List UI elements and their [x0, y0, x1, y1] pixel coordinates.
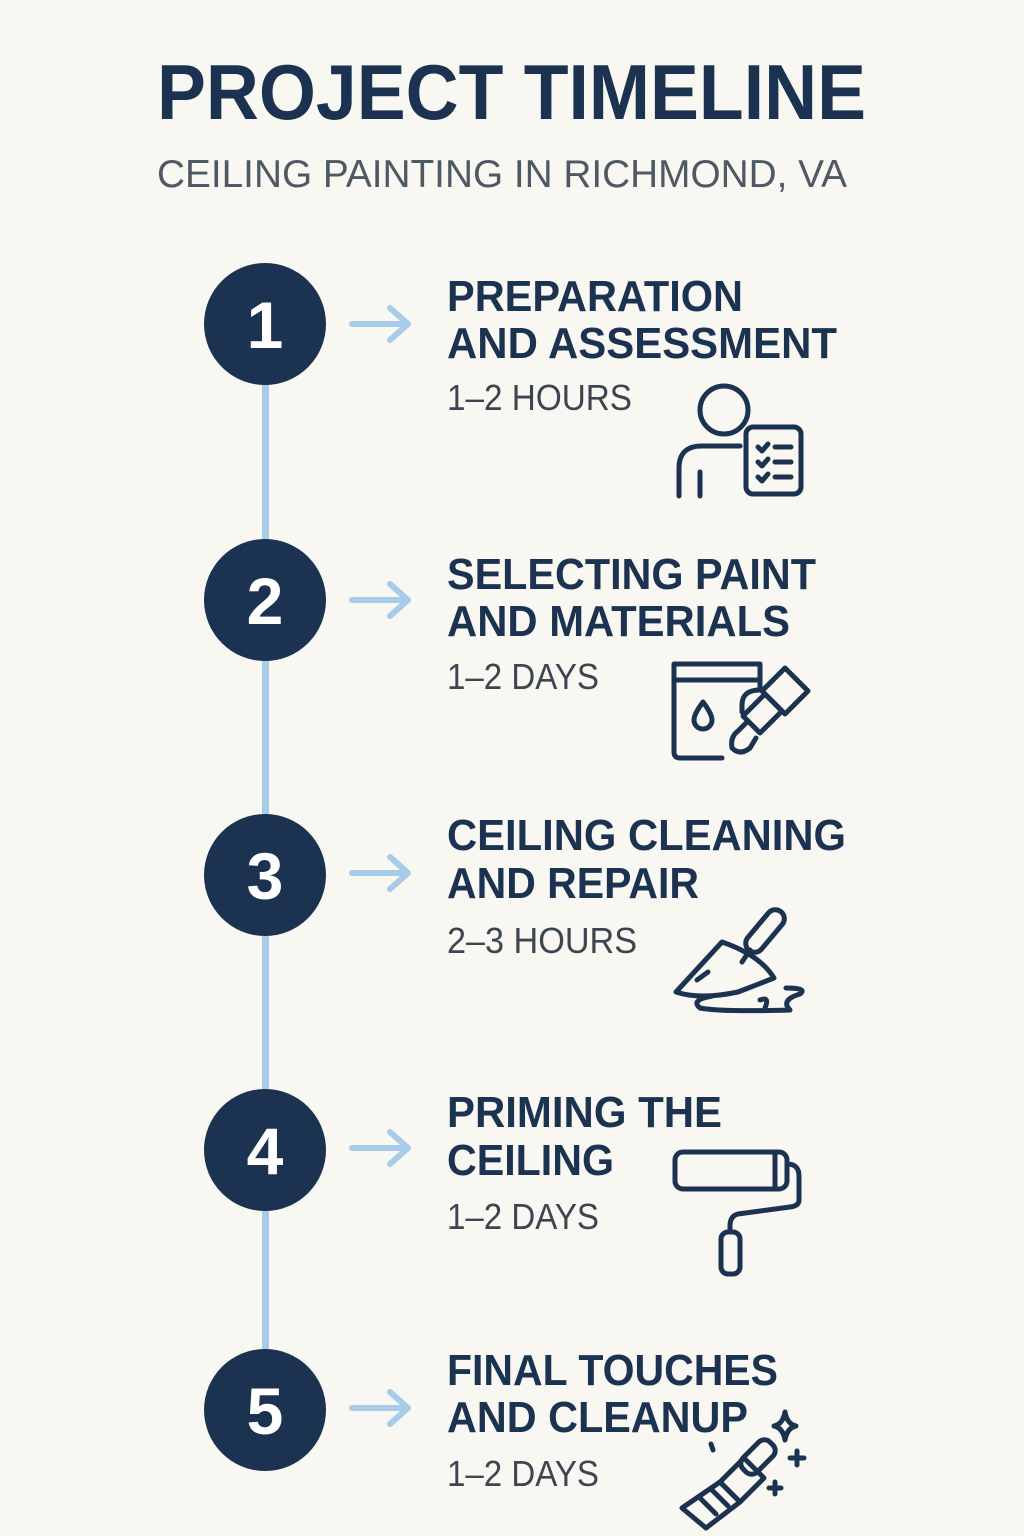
step 1: 1 — [247, 288, 283, 362]
icon: brush with sparkles — [682, 1412, 804, 1528]
step 4: PRIMING THE — [447, 1088, 722, 1137]
step 5: FINAL TOUCHES — [447, 1346, 778, 1395]
step 2: SELECTING PAINT — [447, 550, 816, 599]
step 2: AND MATERIALS — [447, 597, 790, 646]
step 5: 1–2 DAYS — [447, 1453, 599, 1494]
title: PROJECT TIMELINE — [157, 48, 866, 136]
step 1 — [204, 263, 837, 496]
timeline line — [262, 324, 269, 1410]
step 4 — [204, 1088, 799, 1274]
icon: person with checklist — [679, 386, 801, 496]
icon: paint can and brush — [674, 664, 808, 758]
step 1: PREPARATION — [447, 272, 743, 321]
step 3: CEILING CLEANING — [447, 811, 846, 860]
step 3: 2–3 HOURS — [447, 920, 637, 961]
step 1: AND ASSESSMENT — [447, 319, 837, 368]
icon: paint roller — [675, 1152, 799, 1274]
step 2 — [204, 539, 816, 758]
step 5: AND CLEANUP — [447, 1393, 748, 1442]
step 4: 4 — [247, 1114, 284, 1188]
step 4: 1–2 DAYS — [447, 1196, 599, 1237]
step 2: 2 — [247, 564, 283, 638]
step 3 — [204, 811, 846, 1011]
step 3: 3 — [247, 839, 283, 913]
icon: trowel with plaster — [676, 906, 802, 1011]
step 4: CEILING — [447, 1136, 614, 1185]
step 3: AND REPAIR — [447, 859, 699, 908]
step 5: 5 — [247, 1374, 283, 1448]
step 2: 1–2 DAYS — [447, 656, 599, 697]
step 5 — [204, 1346, 804, 1528]
subtitle: CEILING PAINTING IN RICHMOND, VA — [157, 153, 847, 196]
step 1: 1–2 HOURS — [447, 377, 632, 418]
